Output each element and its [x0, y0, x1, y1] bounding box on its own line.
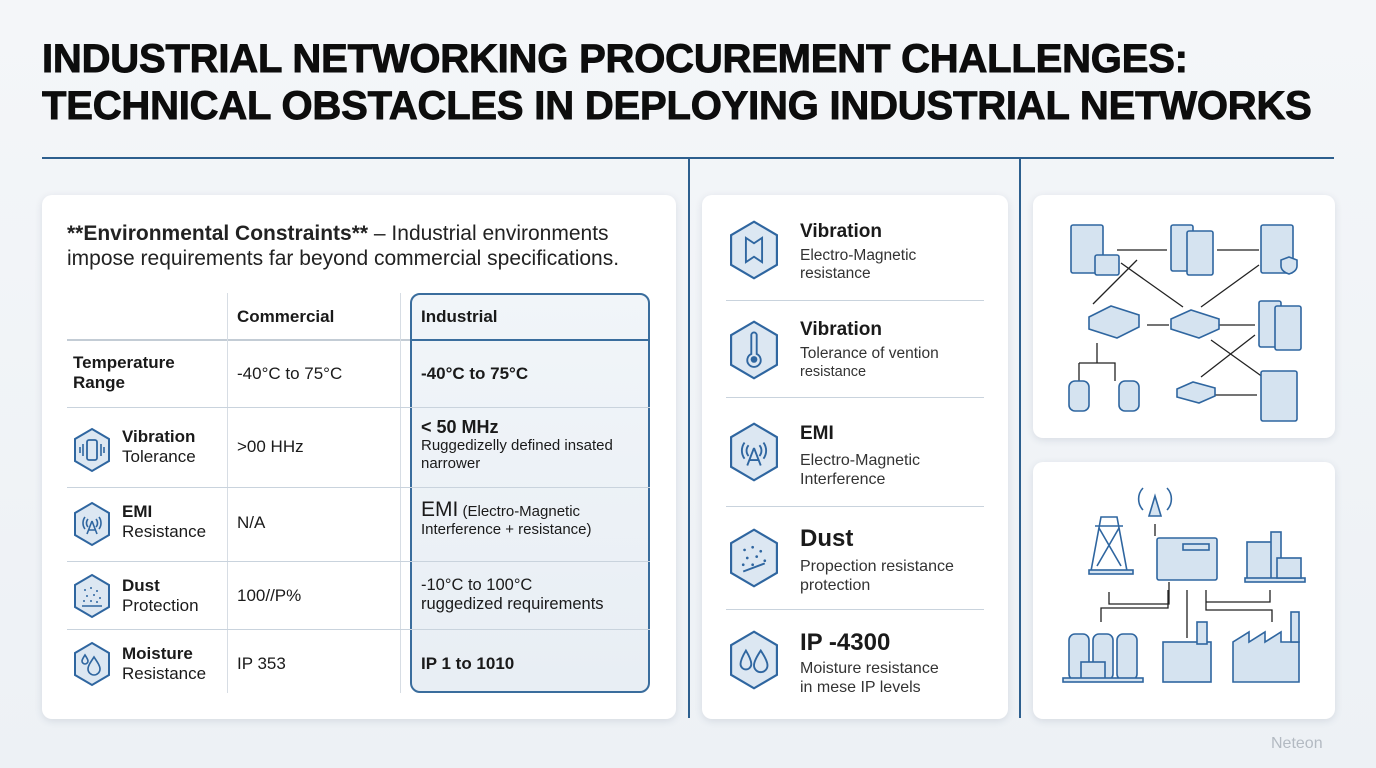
icon: moisture — [74, 642, 110, 686]
row: moisture: IP 1 to 1010 — [421, 654, 514, 673]
row: moisture: IP 353 — [237, 654, 286, 673]
intro text: **Environmental Constraints** – Industrial environments — [67, 222, 609, 245]
item: EMI: Electro-Magnetic — [800, 452, 920, 469]
item: EMI — [730, 422, 920, 488]
panel: network diagram — [1033, 195, 1335, 438]
row: dust: Protection — [122, 596, 199, 615]
item: IP moisture: in mese IP levels — [800, 679, 921, 696]
item: vibration EM: Vibration — [800, 221, 882, 242]
icon: vibration — [74, 428, 110, 472]
row: temperature: Temperature — [73, 353, 175, 372]
row: moisture: Resistance — [122, 664, 206, 683]
row: EMI: Interference + resistance) — [421, 521, 592, 538]
row: EMI: N/A — [237, 513, 265, 532]
row: vibration: < 50 MHz — [421, 417, 499, 437]
panel: environmental constraints table — [42, 195, 676, 719]
row: dust: 100//P% — [237, 586, 301, 605]
intro text: impose requirements far beyond commercial specifications. — [67, 247, 619, 270]
item: vibration tolerance: Vibration — [800, 319, 882, 340]
icon: dust — [74, 574, 110, 618]
item: dust — [730, 525, 954, 594]
row: EMI — [74, 498, 592, 546]
item: IP moisture: IP -4300 — [800, 629, 890, 656]
item: vibration tolerance — [730, 319, 939, 380]
row: vibration: Vibration — [122, 427, 195, 446]
item: vibration tolerance: resistance — [800, 364, 866, 380]
item: EMI: Interference — [800, 471, 885, 488]
row: vibration: narrower — [421, 455, 480, 472]
row: temperature: Range — [73, 373, 125, 392]
row: moisture: Moisture — [122, 644, 193, 663]
row: dust: Dust — [122, 576, 160, 595]
icon: EMI — [74, 502, 110, 546]
item: EMI: EMI — [800, 423, 834, 444]
panel: constraint list — [702, 195, 1008, 719]
row: temperature: -40°C to 75°C — [237, 364, 342, 383]
row: vibration: Tolerance — [122, 447, 196, 466]
row: dust — [74, 574, 604, 618]
panel: environmental constraints table: Industrial — [421, 307, 498, 326]
row: vibration — [74, 417, 613, 472]
item: vibration EM — [730, 220, 916, 282]
row: moisture — [74, 642, 514, 686]
title: INDUSTRIAL NETWORKING PROCUREMENT CHALLENGES: — [42, 37, 1188, 81]
intro text — [67, 222, 619, 270]
item: IP moisture — [730, 629, 939, 696]
panel: industrial sites diagram — [1033, 462, 1335, 719]
header row: Commercial — [237, 307, 334, 326]
item: IP moisture: Moisture resistance — [800, 660, 939, 677]
row: vibration: >00 HHz — [237, 437, 304, 456]
item: dust: Propection resistance — [800, 558, 954, 575]
item: vibration EM: resistance — [800, 265, 871, 282]
item: dust: Dust — [800, 525, 853, 552]
watermark: Neteon — [1271, 735, 1323, 752]
row: EMI: Resistance — [122, 522, 206, 541]
row: temperature: -40°C to 75°C — [421, 364, 528, 383]
title: TECHNICAL OBSTACLES IN DEPLOYING INDUSTRIAL NETWORKS — [42, 84, 1312, 128]
row: temperature — [73, 353, 528, 392]
row: dust: ruggedized requirements — [421, 595, 604, 613]
item: dust: protection — [800, 577, 870, 594]
item: vibration tolerance: Tolerance of vention — [800, 345, 939, 362]
row: EMI: EMI — [122, 502, 152, 521]
industrial column highlight — [410, 293, 650, 693]
row: vibration: Ruggedizelly defined insated — [421, 437, 613, 454]
item: vibration EM: Electro-Magnetic — [800, 247, 916, 264]
title — [42, 37, 1312, 128]
row: EMI: EMI (Electro-Magnetic — [421, 498, 580, 521]
row: dust: -10°C to 100°C — [421, 576, 532, 594]
